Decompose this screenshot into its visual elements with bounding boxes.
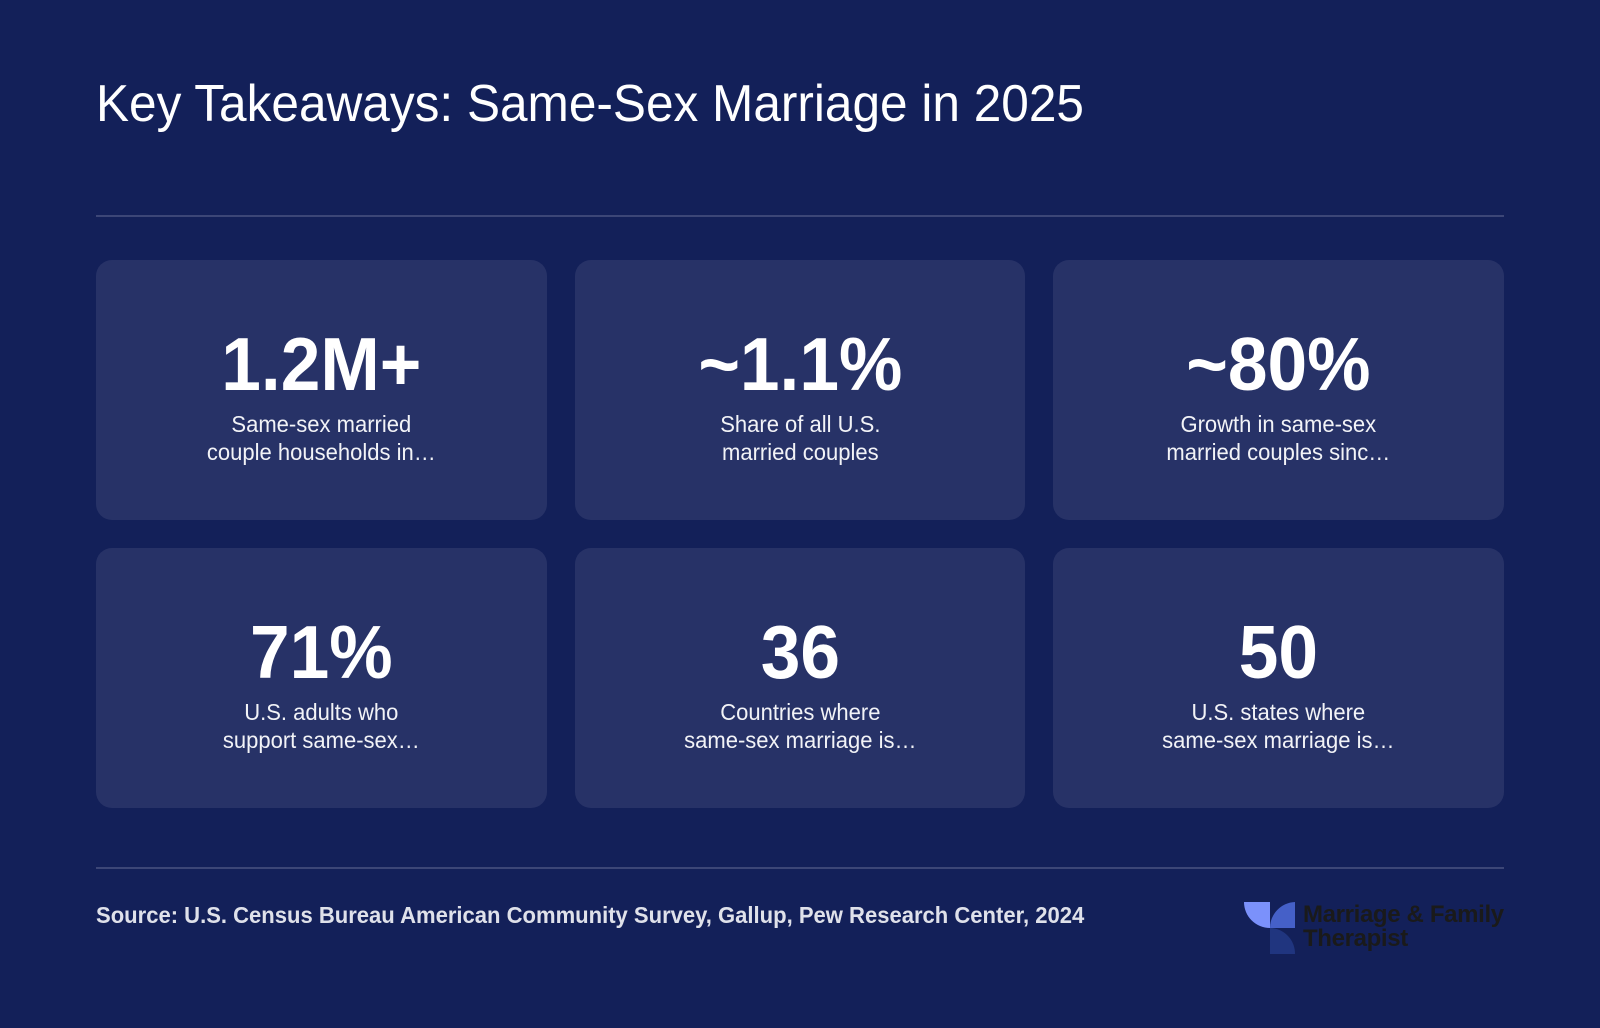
stat label: Share of all U.S. xyxy=(720,411,880,437)
stat label: Same-sex married xyxy=(231,411,411,437)
stat label: married couples sinc… xyxy=(1167,439,1391,465)
stat label xyxy=(684,699,916,753)
stat number: 71% xyxy=(250,610,393,694)
stat label: Countries where xyxy=(720,699,880,725)
stat label xyxy=(207,411,436,465)
stat label: U.S. states where xyxy=(1192,699,1366,725)
panel: stat ~1.1% xyxy=(575,260,1025,520)
source note: Source: U.S. Census Bureau American Community Survey, Gallup, Pew Research Center, 2024 xyxy=(96,902,1084,928)
logo wordmark: Marriage & Family xyxy=(1303,900,1504,928)
stat label xyxy=(223,699,420,753)
stat number: 36 xyxy=(760,610,840,694)
panel: stat 71% xyxy=(96,548,547,808)
stat label: support same-sex… xyxy=(223,727,420,753)
panel: stat 36 xyxy=(575,548,1025,808)
stat label xyxy=(1167,411,1391,465)
stat label xyxy=(1162,699,1395,753)
stat label: same-sex marriage is… xyxy=(684,727,916,753)
logo wordmark: Therapist xyxy=(1303,925,1408,952)
stat number: ~1.1% xyxy=(698,322,902,406)
panel: stat ~80% xyxy=(1053,260,1504,520)
panel: stat 1.2M+ xyxy=(96,260,547,520)
stat label: couple households in… xyxy=(207,439,436,465)
stat number: ~80% xyxy=(1187,322,1371,406)
stat label: U.S. adults who xyxy=(244,699,398,725)
stat label: same-sex marriage is… xyxy=(1162,727,1395,753)
title: Key Takeaways: Same-Sex Marriage in 2025 xyxy=(96,75,1084,133)
stat number: 1.2M+ xyxy=(221,322,421,406)
panel: stat 50 xyxy=(1053,548,1504,808)
logo wordmark xyxy=(1303,900,1504,952)
stat label: Growth in same-sex xyxy=(1181,411,1377,437)
icon: logo mark xyxy=(1244,902,1295,954)
stat label xyxy=(720,411,880,465)
stat number: 50 xyxy=(1239,610,1318,694)
stat label: married couples xyxy=(722,439,878,465)
